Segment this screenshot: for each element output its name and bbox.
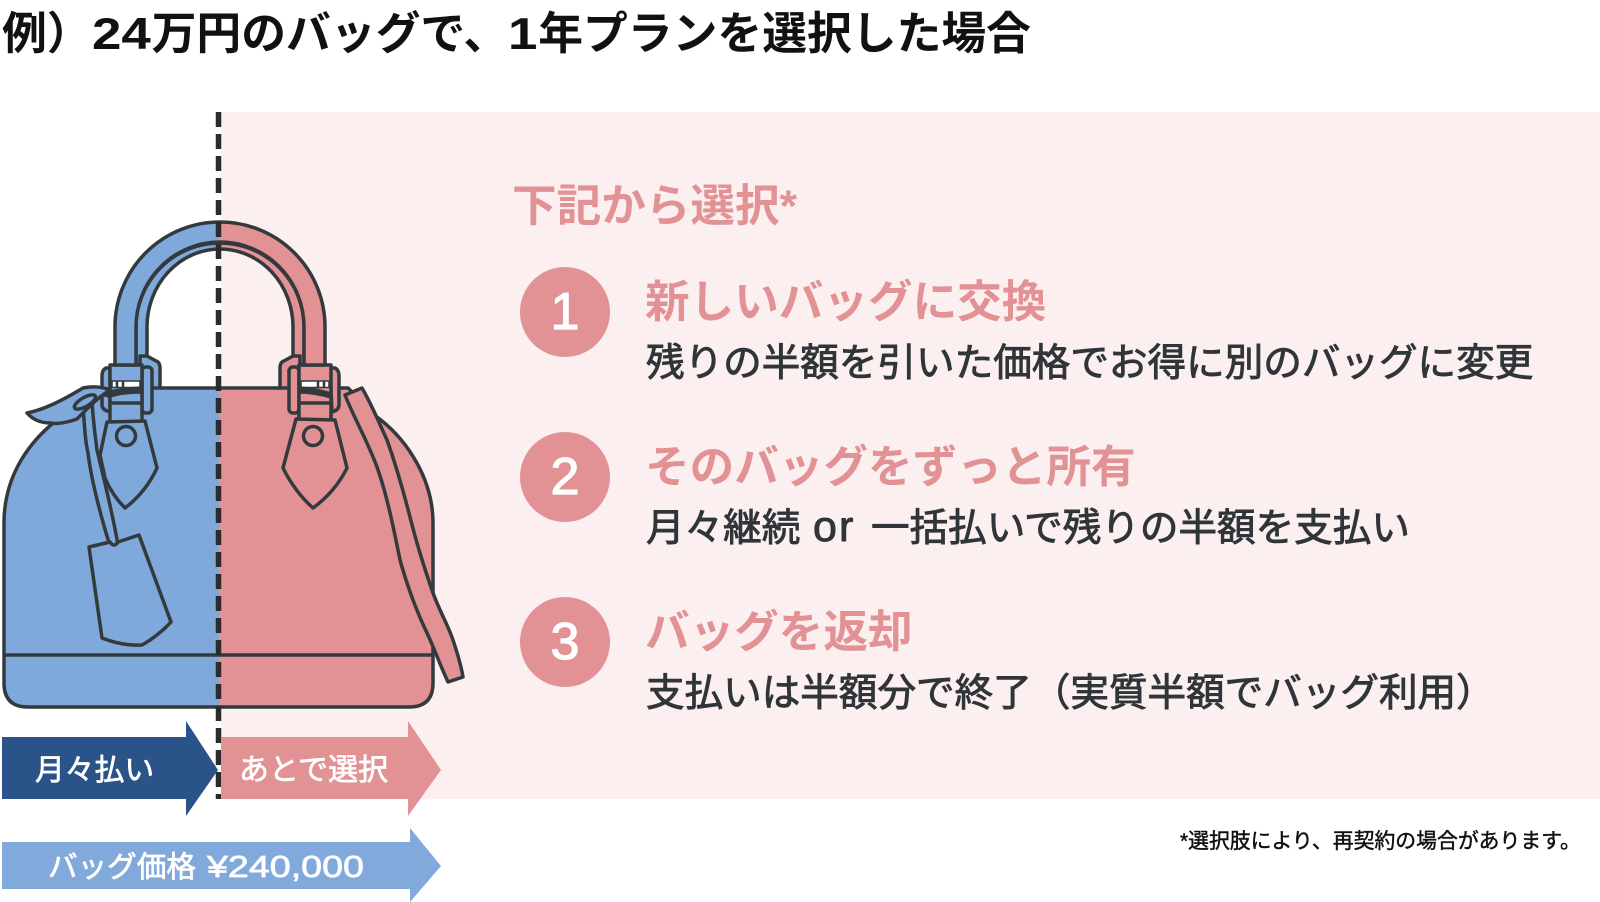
option 1 description: 残りの半額を引いた価格でお得に別のバッグに変更	[646, 342, 1533, 385]
option 3 heading: バッグを返却	[645, 608, 913, 657]
option 3 number: 3	[551, 613, 579, 671]
option 1 number: 1	[551, 283, 579, 341]
title: 24	[92, 9, 150, 59]
bag body	[4, 388, 433, 707]
arrow: bag price: バッグ価格	[48, 851, 196, 884]
right fob rivet	[304, 426, 322, 446]
arrow: bag price: ¥240,000	[206, 849, 364, 884]
left leather fob	[100, 421, 157, 508]
panel: later choice background	[221, 112, 1600, 799]
bag ribbon	[27, 387, 110, 424]
arrow: bag price	[2, 828, 441, 902]
option 2 number	[520, 432, 610, 522]
footnote: *選択肢により、再契約の場合があります。	[1180, 830, 1581, 853]
arrow: monthly payment	[2, 721, 218, 816]
left hardware	[100, 365, 152, 422]
title: 1	[508, 9, 538, 59]
option 1 heading: 新しいバッグに交換	[645, 278, 1046, 327]
arrow: choose later: あとで選択	[239, 754, 388, 787]
luggage tag	[89, 535, 171, 645]
luggage tag strap	[83, 400, 118, 546]
shoulder strap	[345, 388, 463, 682]
divider: dashed line	[216, 112, 221, 799]
option 1 number	[520, 267, 610, 357]
right hardware	[289, 365, 339, 422]
arrow: monthly payment: 月々払い	[35, 754, 154, 787]
option 2 description: 月々継続 or 一括払いで残りの半額を支払い	[646, 503, 1410, 551]
arrow: choose later	[221, 721, 441, 816]
panel heading: 下記から選択*	[512, 182, 797, 231]
left fob rivet	[116, 426, 136, 446]
option 3 number	[520, 597, 610, 687]
ribbon knot	[72, 392, 98, 412]
bag base line	[4, 653, 433, 657]
option 2 heading: そのバッグをずっと所有	[645, 443, 1136, 492]
right leather fob	[283, 419, 347, 508]
bag handle inner band	[136, 243, 304, 365]
bag handle outer band	[115, 222, 325, 365]
title: 例） 万円のバッグで、 年プランを選択した場合	[2, 9, 1031, 59]
option 3 description: 支払いは半額分で終了（実質半額でバッグ利用）	[646, 672, 1495, 715]
icon: handbag	[4, 222, 463, 707]
rear strap tabs	[140, 356, 300, 390]
option 2 number: 2	[551, 448, 579, 506]
